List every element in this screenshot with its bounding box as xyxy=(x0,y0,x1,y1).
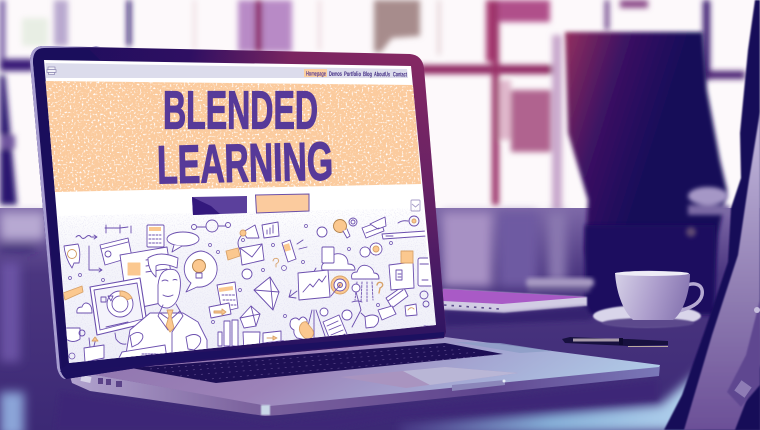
doodle: growth chart on easel xyxy=(289,268,330,340)
keyboard xyxy=(131,343,503,383)
doodle: pot and sign xyxy=(242,330,282,345)
nav: menu labels: Contact xyxy=(393,71,408,79)
screen: purple button xyxy=(192,196,247,215)
doodle: coin node xyxy=(398,216,419,226)
blurred phone on desk xyxy=(526,278,594,292)
background: desk surface xyxy=(0,208,760,430)
screen: navigation bar xyxy=(46,63,408,79)
notebook xyxy=(443,289,592,326)
base top deck xyxy=(68,337,660,406)
doodle: binder rings xyxy=(105,225,131,233)
doodle: squiggle arrow xyxy=(76,235,97,239)
doodle: calculator top xyxy=(147,225,164,247)
screen: small check icon xyxy=(411,200,420,211)
doodle: folder with thumbs xyxy=(389,251,434,290)
right foreground chair frame xyxy=(664,0,760,430)
banner title: LEARNING xyxy=(156,132,334,195)
banner title: BLENDED xyxy=(163,80,318,140)
doodle: target xyxy=(331,276,349,296)
doodle: small window cards xyxy=(100,238,175,310)
laptop base xyxy=(68,337,660,416)
doodle: search bar xyxy=(382,231,426,239)
laptop screen xyxy=(44,60,440,372)
base front edge xyxy=(68,365,660,416)
doodle: phone xyxy=(282,240,307,262)
pen xyxy=(562,337,668,347)
doodle: arrow box and calculator xyxy=(209,282,238,318)
doodle: lightbulb speech bubble xyxy=(184,251,217,292)
nav: menu labels: AboutUs xyxy=(374,71,390,78)
doodle: pencil cup xyxy=(84,337,104,362)
nav: menu labels: Demos xyxy=(329,71,342,78)
nav: logo icon xyxy=(47,67,56,74)
doodle: small cloud xyxy=(77,303,92,313)
doodle: bar chart card xyxy=(262,222,279,238)
doodle: lightbulb top xyxy=(334,218,357,238)
nav: menu labels: Homepage xyxy=(306,71,326,78)
coffee cup and saucer xyxy=(593,271,702,328)
doodle: clocks and question mark xyxy=(242,227,352,320)
doodle: scattered dots xyxy=(68,224,392,359)
banner title xyxy=(156,80,334,195)
doodle: books xyxy=(218,320,238,346)
doodle: mug xyxy=(66,328,85,342)
doodle: clouds xyxy=(322,247,379,302)
nav: menu labels xyxy=(306,71,408,79)
doodle: megaphone and envelope xyxy=(226,225,264,265)
ports on side xyxy=(80,375,122,387)
doodle: credit card and note xyxy=(378,286,417,320)
doodle: orange ruler xyxy=(63,286,83,300)
doodle: businessman xyxy=(118,254,208,358)
screen: orange hero banner xyxy=(44,80,424,195)
doodle: orange question marks xyxy=(377,282,383,293)
blurred cup behind xyxy=(686,187,730,237)
doodle: check node xyxy=(192,220,230,232)
screen: orange button xyxy=(256,194,309,213)
doodle: person walking xyxy=(352,284,378,328)
doodle: tablet with donut chart xyxy=(90,278,147,344)
doodle: gem shapes xyxy=(240,277,279,328)
doodle: cards xyxy=(362,217,386,238)
screen: doodle illustration xyxy=(50,206,440,372)
laptop xyxy=(30,46,660,416)
trackpad xyxy=(340,367,518,388)
doodle: speech oval xyxy=(167,232,199,252)
speaker grille xyxy=(455,342,552,353)
dark office chair back xyxy=(565,32,727,315)
nav: highlighted homepage tab xyxy=(304,69,327,77)
doodle: gears xyxy=(360,243,382,257)
laptop lid xyxy=(30,46,446,379)
front notch and corner highlight xyxy=(261,380,506,415)
doodle: circles at right xyxy=(420,291,434,326)
doodle: ring speech bubble xyxy=(64,244,80,268)
doodle: clipboard xyxy=(322,314,348,336)
nav: menu labels: Blog xyxy=(363,71,372,78)
doodle: axes xyxy=(89,246,102,272)
doodle: puzzle pieces xyxy=(290,317,314,340)
nav: menu labels: Portfolio xyxy=(344,71,361,78)
